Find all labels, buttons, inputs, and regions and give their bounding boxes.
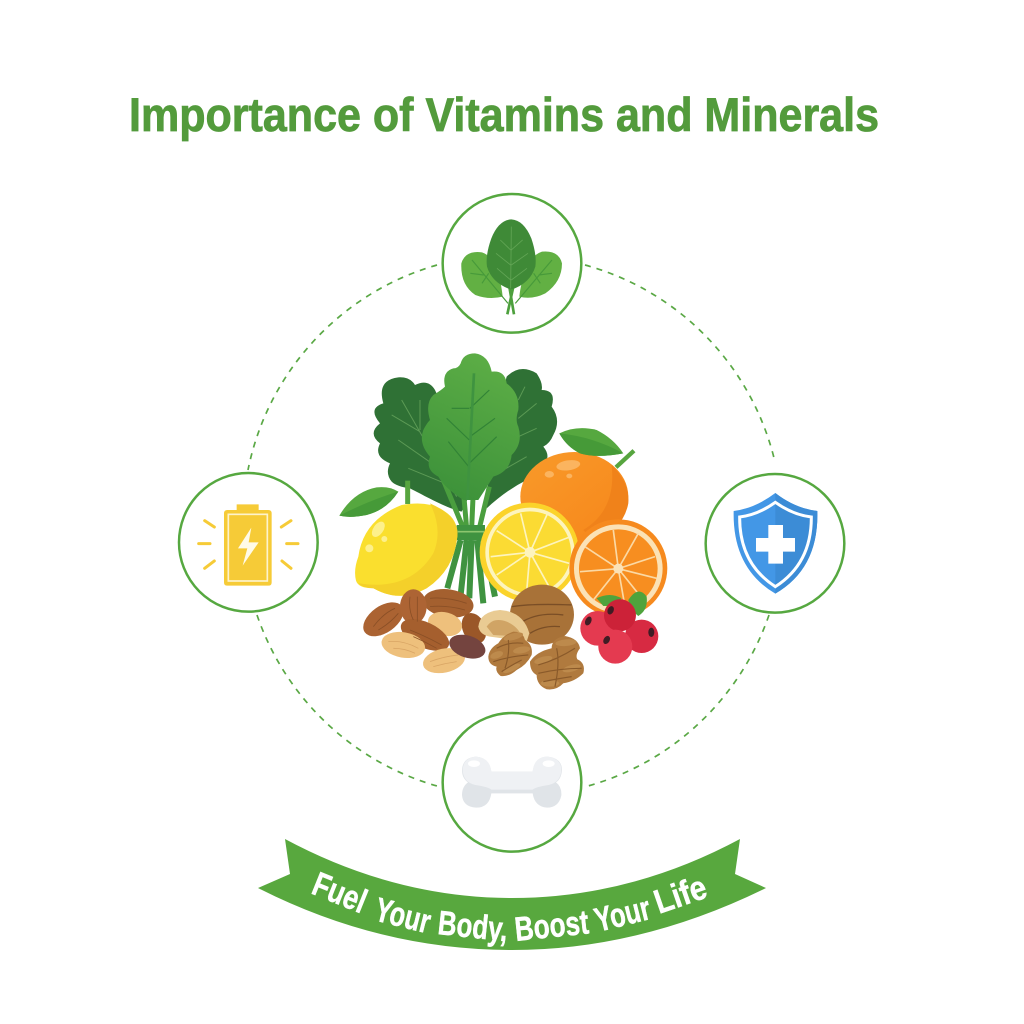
- icon: lightning bolt: [238, 528, 259, 566]
- banner slogan: [307, 865, 712, 949]
- walnut in shell: [510, 585, 574, 645]
- banner slogan: Body,: [436, 904, 510, 949]
- kale: stems below the tie: [447, 537, 495, 603]
- icon circle: bone: [443, 713, 581, 852]
- lemon whole: [355, 503, 458, 596]
- orange whole: [520, 452, 628, 541]
- icon: right leaf: [519, 251, 562, 298]
- icon: stems: [507, 287, 514, 314]
- almonds: [357, 586, 491, 677]
- icon: left leaf: [461, 252, 503, 298]
- banner slogan: Fuel: [307, 865, 372, 921]
- berry leaves: [597, 592, 647, 616]
- kale: dark back right leaf: [487, 369, 557, 508]
- banner slogan: Your: [371, 891, 435, 941]
- half walnut shell: [478, 610, 529, 642]
- kale: middle leaf: [422, 353, 520, 500]
- banner slogan: Your: [591, 889, 654, 940]
- icon: energy rays: [199, 521, 298, 568]
- icon: white cross: [756, 525, 795, 564]
- icon: battery body: [224, 504, 272, 586]
- title: Importance of Vitamins and Minerals: [129, 88, 879, 141]
- banner slogan: Boost: [513, 903, 590, 949]
- kale: upper stems: [443, 480, 489, 528]
- lemon slice: [480, 503, 579, 602]
- kale: dark back left leaf: [374, 377, 477, 512]
- banner slogan: Life: [649, 868, 712, 922]
- orange stem and leaf: [559, 428, 634, 467]
- icon circle: immune shield: [706, 474, 844, 613]
- orange slice: [569, 519, 667, 617]
- icon circle: spinach leaves: [443, 194, 581, 333]
- icon: shield: [734, 493, 817, 594]
- red berries: [580, 599, 658, 664]
- kale: tie: [457, 525, 485, 540]
- lemon stem and leaf: [339, 481, 408, 517]
- icon: centre leaf: [487, 219, 536, 290]
- icon circle: energy battery: [179, 473, 318, 612]
- central food illustration: [339, 353, 667, 690]
- icon: leaf veins: [470, 260, 552, 303]
- dashed connecting ring: [248, 265, 775, 786]
- walnut kernel right: [530, 636, 584, 690]
- walnut kernel left: [488, 631, 532, 676]
- icon: bone: [462, 757, 562, 808]
- banner ribbon: [258, 839, 766, 950]
